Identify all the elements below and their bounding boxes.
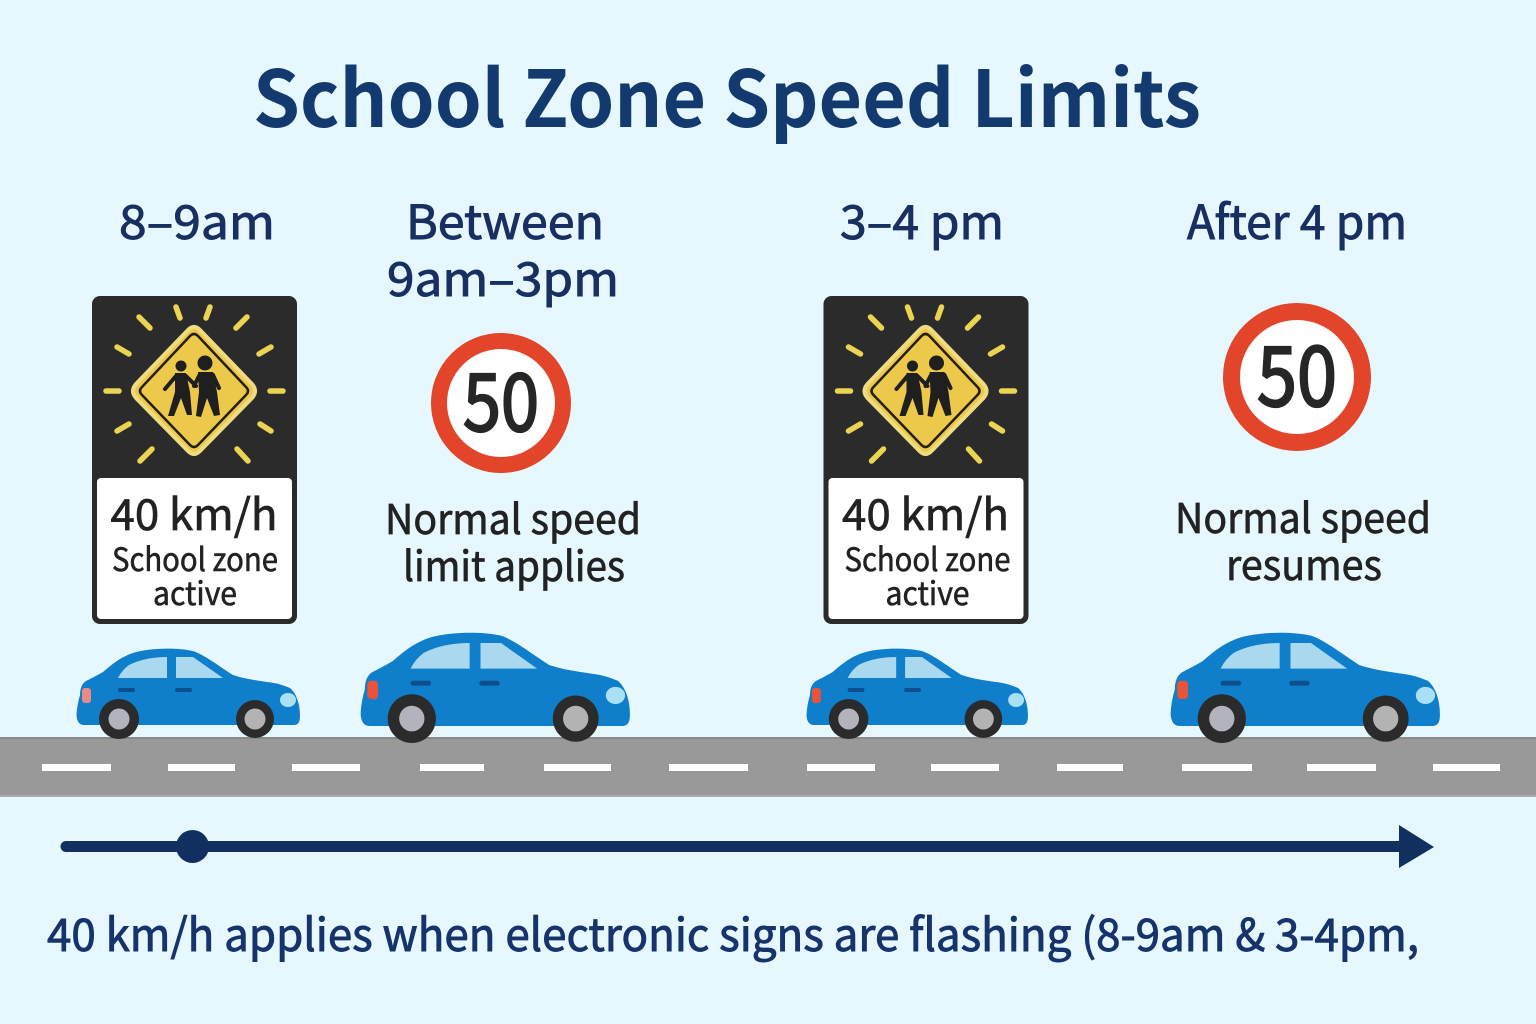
heading: between 9am-3pm bbox=[387, 184, 619, 310]
footnote: 40 km/h applies when electronic signs are flashing (8-9am & 3-4pm, bbox=[47, 899, 1419, 964]
heading: 8-9am: 8–9am bbox=[119, 184, 275, 253]
heading: between 9am-3pm: Between bbox=[406, 184, 604, 253]
caption: normal speed resumes bbox=[1175, 485, 1431, 592]
timeline marker bbox=[176, 830, 209, 863]
speed panel bbox=[97, 478, 292, 619]
caption: normal speed resumes: Normal speed bbox=[1175, 485, 1431, 545]
caption: normal speed resumes: resumes bbox=[1226, 532, 1382, 592]
speed sign: 50 midday bbox=[439, 339, 563, 465]
speed panel: School zone bbox=[112, 535, 278, 581]
car 3 bbox=[806, 649, 1028, 739]
caption: normal speed limit applies: limit applies bbox=[403, 533, 625, 593]
road bbox=[0, 737, 1536, 797]
speed panel: 40 km/h bbox=[842, 481, 1009, 543]
car 1 bbox=[76, 649, 300, 739]
school zone sign: afternoon bbox=[824, 296, 1028, 624]
speed sign: 50 after 4pm: 50 bbox=[1257, 310, 1337, 430]
speed panel: School zone bbox=[844, 535, 1010, 581]
car 2 bbox=[361, 633, 630, 743]
warning diamond: children crossing bbox=[133, 327, 255, 454]
speed panel bbox=[828, 478, 1024, 619]
speed sign: 50 midday: 50 bbox=[463, 339, 539, 455]
title: School Zone Speed Limits bbox=[253, 38, 1201, 150]
caption: normal speed limit applies: Normal speed bbox=[385, 486, 641, 546]
flashing lights bbox=[106, 307, 283, 461]
school zone sign: morning bbox=[92, 296, 297, 624]
timeline arrow bbox=[66, 825, 1434, 868]
warning diamond: children crossing bbox=[864, 327, 986, 454]
speed panel: active bbox=[153, 569, 237, 615]
caption: normal speed limit applies bbox=[385, 486, 641, 593]
heading: after 4pm: After 4 pm bbox=[1187, 184, 1407, 253]
heading: 3-4pm: 3–4 pm bbox=[840, 184, 1004, 253]
speed panel: 40 km/h bbox=[110, 481, 278, 543]
flashing lights bbox=[838, 307, 1014, 461]
speed panel: active bbox=[886, 569, 970, 615]
speed sign: 50 after 4pm bbox=[1232, 310, 1362, 442]
car 4 bbox=[1171, 633, 1440, 743]
heading: between 9am-3pm: 9am–3pm bbox=[387, 241, 619, 310]
